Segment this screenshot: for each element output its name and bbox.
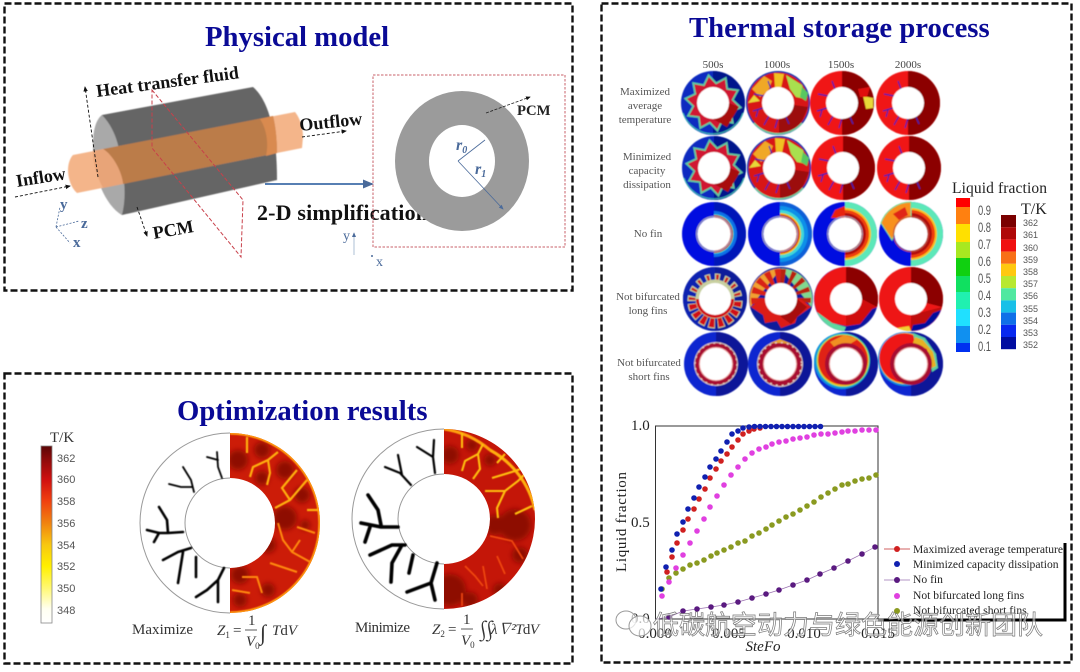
legend: temperature: 361 bbox=[1023, 230, 1038, 240]
axes: 2-D: x bbox=[376, 255, 383, 270]
watermark text: 低碳航空动力与绿色能源创新团队 bbox=[653, 605, 1043, 642]
axes: 2-D bbox=[343, 229, 383, 270]
colour bar: temperature: 356 bbox=[57, 518, 75, 530]
axes: 3-D bbox=[56, 197, 88, 251]
cylinder with tube bbox=[68, 87, 303, 215]
colour bar: temperature: T/K bbox=[50, 430, 74, 446]
row labels: Minimized bbox=[623, 151, 672, 163]
panel: physical model bbox=[4, 4, 572, 290]
row labels: average bbox=[628, 100, 662, 112]
formula: minimize: 0 bbox=[470, 640, 475, 650]
colour bar: temperature: 348 bbox=[57, 605, 75, 617]
legend: temperature: 358 bbox=[1023, 267, 1038, 277]
chart legend bbox=[878, 543, 1065, 620]
legend: temperature: 356 bbox=[1023, 291, 1038, 301]
x axis labels: 0.005 bbox=[712, 626, 746, 642]
formula: maximize: = bbox=[233, 623, 241, 639]
legend: liquid fraction: 0.6 bbox=[978, 254, 991, 269]
x axis labels: 0.015 bbox=[861, 626, 895, 642]
legend: liquid fraction: 0.7 bbox=[978, 237, 991, 252]
legend: temperature: 360 bbox=[1023, 243, 1038, 253]
formula: maximize: V bbox=[246, 634, 255, 650]
formula: minimize: λ∇²TdV bbox=[490, 622, 541, 638]
label: 2-D simplification: 2-D simplification bbox=[257, 200, 428, 225]
flow arrows bbox=[15, 87, 346, 236]
colour bar: temperature: 362 bbox=[57, 453, 75, 465]
legend: temperature: 357 bbox=[1023, 279, 1038, 289]
label: PCM: PCM bbox=[151, 216, 195, 243]
annulus cross section: 1 bbox=[481, 169, 486, 180]
formula: minimize: Minimize bbox=[355, 620, 410, 636]
formula: maximize: Z bbox=[217, 623, 225, 639]
ring: minimize result bbox=[352, 426, 538, 612]
annulus cross section: r bbox=[475, 161, 481, 178]
legend: temperature: T/K bbox=[1021, 201, 1047, 218]
formula: minimize: = bbox=[448, 622, 456, 638]
ring row: short fins bbox=[684, 332, 943, 396]
formula: minimize: ∬ bbox=[476, 620, 497, 644]
legend: liquid fraction: 0.4 bbox=[978, 288, 991, 303]
label: inflow: Inflow bbox=[14, 163, 67, 191]
formula: maximize: 0 bbox=[255, 641, 260, 651]
axes: 3-D: x bbox=[73, 235, 81, 251]
formula: maximize bbox=[132, 613, 299, 651]
cut plane bbox=[152, 90, 243, 257]
ring row: minimized capacity dissipation bbox=[682, 136, 941, 200]
x axis labels: 0.010 bbox=[787, 626, 821, 642]
y axis labels: 1.0 bbox=[631, 418, 650, 434]
panel: thermal storage process bbox=[602, 4, 1072, 662]
formula: maximize: TdV bbox=[272, 623, 299, 639]
row labels: Not bifurcated bbox=[617, 357, 681, 369]
chart legend: Not bifurcated short fins bbox=[913, 604, 1027, 617]
legend: temperature: 362 bbox=[1023, 218, 1038, 228]
heading: physical model: Physical model bbox=[205, 21, 389, 53]
series: long fins bbox=[662, 430, 876, 596]
series: maximized average temperature bbox=[667, 428, 760, 572]
row labels: No fin bbox=[634, 228, 663, 240]
formula: maximize: ∫ bbox=[258, 620, 268, 646]
colour bar: temperature: 360 bbox=[57, 474, 75, 486]
legend: liquid fraction bbox=[952, 180, 1047, 354]
colour bar: temperature bbox=[41, 430, 75, 623]
watermark bbox=[616, 605, 1043, 642]
legend: temperature: 359 bbox=[1023, 255, 1038, 265]
heading: optimization results: Optimization results bbox=[177, 395, 427, 427]
y axis labels: 0.0 bbox=[631, 611, 650, 627]
x axis labels: 0.000 bbox=[638, 626, 672, 642]
time labels: 2000s bbox=[895, 59, 921, 71]
panel: optimization results bbox=[4, 374, 572, 664]
series: no fin bbox=[656, 547, 875, 619]
annulus cross section: PCM bbox=[517, 103, 551, 119]
legend: liquid fraction: 0.2 bbox=[978, 322, 991, 337]
formula: maximize: 1 bbox=[225, 630, 230, 640]
formula: minimize bbox=[355, 612, 541, 650]
formula: minimize: Z bbox=[432, 622, 440, 638]
y axis labels: 0.5 bbox=[631, 515, 650, 531]
time labels: 500s bbox=[703, 59, 723, 71]
x axis labels bbox=[638, 626, 895, 655]
annulus cross section bbox=[395, 91, 551, 231]
axes: 3-D: z bbox=[81, 216, 88, 232]
row labels: long fins bbox=[629, 305, 667, 317]
arrow: 2-D simplification bbox=[265, 183, 372, 185]
series: short fins bbox=[662, 475, 876, 589]
colour bar: temperature: 352 bbox=[57, 561, 75, 573]
label: outflow: Outflow bbox=[298, 109, 363, 135]
axes: 2-D: y bbox=[343, 229, 350, 244]
colour bar: temperature: 358 bbox=[57, 496, 75, 508]
chart legend: Maximized average temperature bbox=[913, 543, 1063, 556]
series: minimized capacity dissipation bbox=[661, 426, 820, 589]
axes: 3-D: y bbox=[60, 197, 68, 213]
formula: maximize: Maximize bbox=[132, 622, 193, 638]
legend: liquid fraction: 0.9 bbox=[978, 203, 991, 218]
legend: temperature: 354 bbox=[1023, 316, 1038, 326]
legend: temperature: 355 bbox=[1023, 304, 1038, 314]
row labels: temperature bbox=[619, 114, 671, 126]
ring: maximize result bbox=[140, 430, 323, 616]
row labels bbox=[616, 86, 681, 383]
formula: minimize: 2 bbox=[440, 629, 445, 639]
legend: temperature: 352 bbox=[1023, 340, 1038, 350]
annulus cross section: 0 bbox=[462, 145, 467, 156]
legend: temperature: 353 bbox=[1023, 328, 1038, 338]
legend: temperature bbox=[1001, 201, 1047, 350]
time labels bbox=[703, 59, 921, 71]
row labels: capacity bbox=[629, 165, 666, 177]
row labels: Not bifurcated bbox=[616, 291, 680, 303]
line chart: liquid fraction vs SteFo bbox=[614, 418, 1065, 655]
colour bar: temperature: 354 bbox=[57, 540, 75, 552]
legend: liquid fraction: 0.3 bbox=[978, 305, 991, 320]
chart legend: No fin bbox=[913, 573, 943, 586]
row labels: short fins bbox=[628, 371, 670, 383]
colour bar: temperature: 350 bbox=[57, 583, 75, 595]
annulus cross section: r bbox=[456, 137, 462, 154]
formula: minimize: V bbox=[461, 633, 470, 649]
chart legend: Minimized capacity dissipation bbox=[913, 558, 1059, 571]
y axis labels: Liquid fraction bbox=[614, 472, 630, 572]
formula: minimize: 1 bbox=[463, 612, 470, 628]
time labels: 1000s bbox=[764, 59, 790, 71]
row labels: dissipation bbox=[623, 179, 671, 191]
legend: liquid fraction: 0.8 bbox=[978, 220, 991, 235]
legend: liquid fraction: Liquid fraction bbox=[952, 180, 1047, 197]
ring row: maximized average temperature bbox=[681, 71, 940, 135]
legend: liquid fraction: 0.1 bbox=[978, 339, 991, 354]
chart legend: Not bifurcated long fins bbox=[913, 589, 1025, 602]
row labels: Maximized bbox=[620, 86, 671, 98]
heading: thermal storage process: Thermal storage process bbox=[689, 12, 990, 44]
x axis labels: SteFo bbox=[746, 639, 781, 655]
label: heat transfer fluid: Heat transfer fluid bbox=[95, 62, 240, 101]
section box bbox=[373, 75, 565, 247]
ring row: long fins bbox=[683, 267, 943, 331]
y axis labels bbox=[614, 418, 650, 627]
legend: liquid fraction: 0.5 bbox=[978, 271, 991, 286]
ring row: no fin bbox=[682, 202, 943, 266]
icon: chat bubbles bbox=[616, 611, 651, 636]
formula: maximize: 1 bbox=[248, 613, 256, 629]
time labels: 1500s bbox=[828, 59, 854, 71]
